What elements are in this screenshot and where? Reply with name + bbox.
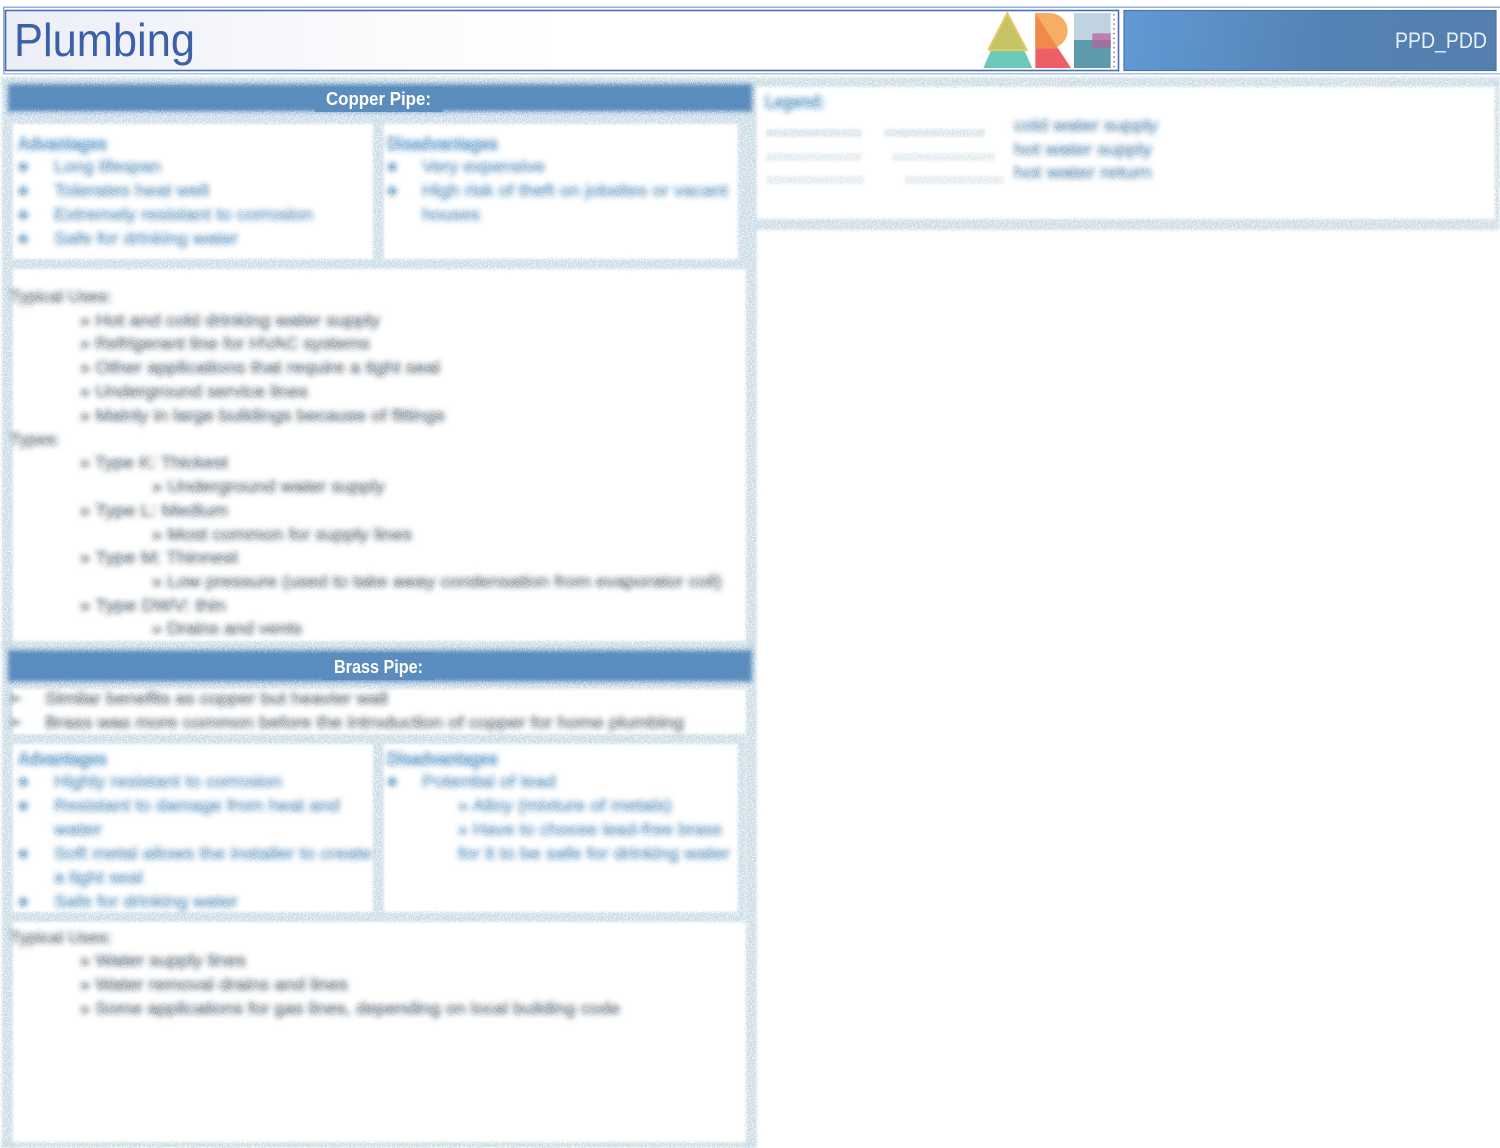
document code: PPD_PDD [1395,28,1487,53]
copper typical uses: » Refrigerant line for HVAC systems [80,334,370,353]
brass advantages: a tight seal [54,868,143,887]
brass advantages: Resistant to damage from heat and [54,796,340,815]
brass advantages [17,749,372,911]
copper advantages: ❖ [17,207,30,223]
copper disadvantages: ❖ [386,159,399,175]
brass disadvantages: Disadvantages [387,749,498,769]
brass pipe heading: Brass Pipe: [334,657,423,677]
copper types: » Type L: Medium [80,501,228,520]
legend labels: hot water supply [1014,140,1153,159]
brass advantages: Soft metal allows the installer to create [54,844,372,863]
copper disadvantages: High risk of theft on jobsites or vacant [422,181,728,200]
brass notes: Similar benefits as copper but heavier wall [45,689,388,708]
copper types: » Type DWV: thin [80,596,226,615]
brass notes: ➢ [8,713,22,732]
copper pipe heading [8,84,752,112]
legend line samples [766,129,1004,184]
brass disadvantages: for it to be safe for drinking water [458,844,730,863]
copper types [10,430,722,638]
copper typical uses: » Mainly in large buildings because of fittings [80,406,445,425]
copper types: » Most common for supply lines [152,525,412,544]
document code box [1124,10,1496,70]
brass pipe heading [8,650,752,682]
brass typical uses: » Water removal drains and lines [80,975,348,994]
copper types: » Type K: Thickest [80,453,228,472]
legend labels: hot water return [1014,163,1152,182]
copper types: » Underground water supply [152,477,386,496]
copper types: » Low pressure (used to take away condensation from evaporator coil) [152,572,722,591]
copper disadvantages: ❖ [386,183,399,199]
copper advantages: Advantages [18,134,107,154]
copper advantages: ❖ [17,159,30,175]
panel: brass pipe [2,641,756,1148]
brass disadvantages: » Alloy (mixture of metals) [458,796,672,815]
legend heading: Legend: [765,92,825,112]
copper typical uses: » Underground service lines [80,382,308,401]
copper advantages: ❖ [17,231,30,247]
brass disadvantages: ❖ [386,774,399,790]
brass typical uses: » Some applications for gas lines, depending on local building code [80,999,620,1018]
copper types: Types: [10,430,60,449]
brass notes: ➢ [8,689,22,708]
brass notes: Brass was more common before the introduction of copper for home plumbing [45,713,684,732]
brass advantages: ❖ [17,774,30,790]
copper advantages: Extremely resistant to corrosion [54,205,313,224]
copper disadvantages [386,134,728,224]
copper advantages [17,134,313,248]
copper disadvantages: Very expensive [422,157,545,176]
copper typical uses: Typical Uses: [10,287,112,306]
brass advantages: water [53,820,102,839]
brass advantages: Highly resistant to corrosion [54,772,282,791]
copper advantages: Long lifespan [54,157,161,176]
brass advantages: Advantages [18,749,107,769]
copper typical uses: » Hot and cold drinking water supply [80,311,381,330]
brass typical uses [10,928,620,1018]
brass advantages: ❖ [17,798,30,814]
copper typical uses: » Other applications that require a tight seal [80,358,440,377]
copper advantages: Tolerates heat well [54,181,209,200]
panel: legend [755,80,1500,230]
icon: ARE logo [983,13,1114,68]
page header [3,6,1500,74]
brass typical uses: » Water supply lines [80,951,246,970]
copper advantages: Safe for drinking water [54,229,238,248]
copper disadvantages: houses [422,205,480,224]
copper types: » Drains and vents [152,619,302,638]
brass typical uses: Typical Uses: [10,928,112,947]
brass advantages: ❖ [17,894,30,910]
brass disadvantages [386,749,730,863]
legend labels [1014,116,1159,182]
title box [6,10,1118,70]
copper advantages: ❖ [17,183,30,199]
brass advantages: Safe for drinking water [54,892,238,911]
brass disadvantages: » Have to choose lead-free brass [458,820,722,839]
brass advantages: ❖ [17,846,30,862]
legend labels: cold water supply [1014,116,1159,135]
brass disadvantages: Potential of lead [422,772,556,791]
title: Plumbing [14,14,195,66]
brass notes [8,689,684,732]
copper pipe heading: Copper Pipe: [326,89,431,109]
copper types: » Type M: Thinnest [80,548,238,567]
copper typical uses [10,287,445,425]
copper disadvantages: Disadvantages [387,134,498,154]
